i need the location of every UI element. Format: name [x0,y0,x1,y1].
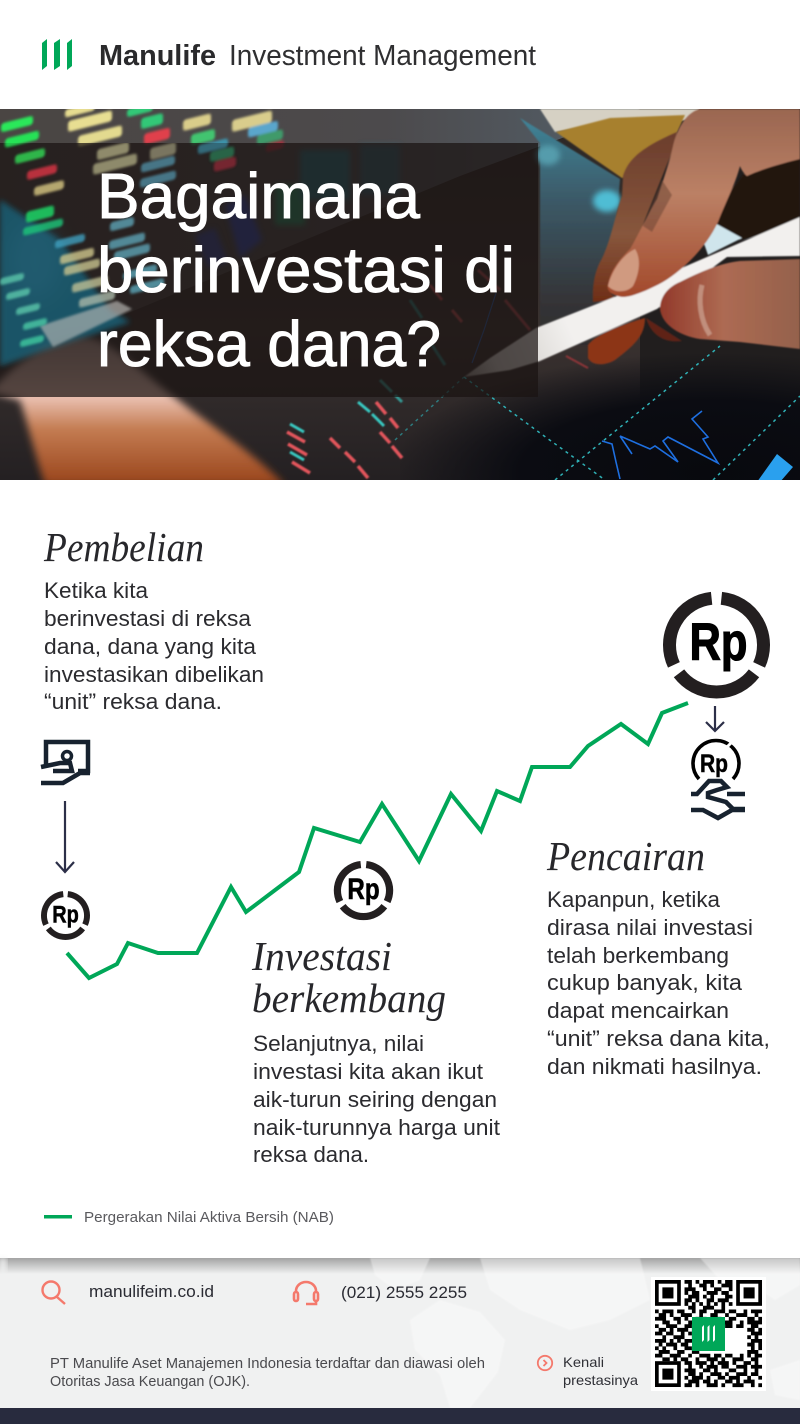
title: berinvestasi di [97,234,515,306]
brand name: Manulife [99,40,216,72]
text: Pembelian description: “unit” reksa dana. [44,689,222,714]
hero photo: stylus on trading tablet [0,109,800,480]
dark palm [716,158,800,240]
under finger [588,318,645,364]
icon: hand holding screen with coin [41,742,90,783]
icon: search [42,1282,65,1304]
icon: small Rp coin: Rp [52,901,79,928]
icon: hands with Rp coin: Rp [700,750,728,778]
phone number: (021) 2555 2255 [341,1283,467,1302]
right screen area [520,118,620,345]
heading: Investasi berkembang [251,933,446,1021]
text: Pencairan description: telah berkembang [547,943,729,968]
title: Bagaimana [97,160,420,232]
text: Investasi description: investasi kita akan ikut [253,1059,483,1084]
hand [464,109,800,377]
icon: small Rp coin [44,894,87,937]
text: Pencairan description [547,887,770,1079]
heading: Pencairan: Pencairan [546,833,705,879]
icon: large Rp coin [669,598,764,692]
text: Pencairan description: cukup banyak, kita [547,970,743,995]
icon: Manulife stripes [42,39,72,70]
heading: Pembelian: Pembelian [43,524,204,570]
legal text: PT Manulife Aset Manajemen Indonesia terdaftar dan diawasi oleh [50,1355,485,1372]
text: Pembelian description: berinvestasi di reksa [44,606,252,631]
text: Pembelian description [44,578,264,714]
text: Pencairan description: “unit” reksa dana kita, [547,1026,770,1051]
legal text [50,1355,485,1390]
link: Kenali prestasinya: Kenali [563,1354,604,1370]
QR code [651,1277,766,1391]
back finger [593,132,677,302]
thin blue tablet line [472,293,496,363]
blue line chart [602,411,718,479]
candle chart marks [287,270,588,478]
icon: medium Rp coin [337,865,390,917]
text: Investasi description: Selanjutnya, nilai [253,1031,424,1056]
index finger [608,109,800,297]
blurred finger foreground [0,336,285,485]
ticker number blobs [0,109,286,171]
text: Pembelian description: investasikan dibelikan [44,662,264,687]
legal text: Otoritas Jasa Keuangan (OJK). [50,1373,250,1390]
text: Pencairan description: dan nikmati hasilnya. [547,1054,762,1079]
title panel [0,143,538,397]
footer panel [0,1258,800,1408]
thumb [660,259,800,349]
text: Investasi description: naik-turunnya harga unit [253,1115,500,1140]
teal monitor glow [0,200,130,366]
arrow: down from large coin [706,706,724,731]
title: reksa dana? [97,308,441,380]
icon: medium Rp coin: Rp [347,873,380,906]
link: Kenali prestasinya [563,1354,638,1388]
title [97,160,515,380]
QR centre logo [692,1317,725,1351]
blue diamond [758,454,793,480]
section: Pencairan [546,833,770,1079]
icon: large Rp coin: Rp [690,613,748,672]
tablet surface below diagonal [0,109,640,480]
icon: circled chevron [538,1356,552,1370]
text: Investasi description: aik-turun seiring dengan [253,1087,497,1112]
stylus [464,217,800,377]
teal dotted chart lines [395,346,800,480]
legend: NAB line: Pergerakan Nilai Aktiva Bersih (NAB) [84,1209,334,1226]
tan and beige background [540,109,700,132]
line chart: NAB movement [67,703,688,978]
world map [370,1258,800,1408]
dark lower right [431,365,800,480]
nail [608,249,639,291]
icon: headset [294,1282,318,1304]
text: Investasi description [253,1031,500,1167]
ticker numbers seen through panel [0,143,238,368]
arrow: down to Rp coin [56,801,74,872]
text: Pencairan description: dapat mencairkan [547,998,729,1023]
link: Kenali prestasinya: prestasinya [563,1372,638,1388]
icon: hands with Rp coin [691,741,745,818]
text: Pembelian description: dana, dana yang kita [44,634,257,659]
blurred screen columns [195,145,400,268]
logo: Manulife Investment Management [42,39,536,72]
text: Pembelian description: Ketika kita [44,578,149,603]
text: Investasi description: reksa dana. [253,1142,369,1167]
heading: Investasi berkembang: berkembang [252,975,446,1021]
section: Investasi berkembang [251,933,500,1167]
section: Pembelian [43,524,264,714]
text: Pencairan description: Kapanpun, ketika [547,887,721,912]
text: Pencairan description: dirasa nilai investasi [547,915,753,940]
footer bar [0,1408,800,1424]
stylus far end [700,222,742,255]
heading: Investasi berkembang: Investasi [251,933,392,979]
brand descriptor: Investment Management [229,40,536,72]
website: manulifeim.co.id [89,1282,214,1301]
